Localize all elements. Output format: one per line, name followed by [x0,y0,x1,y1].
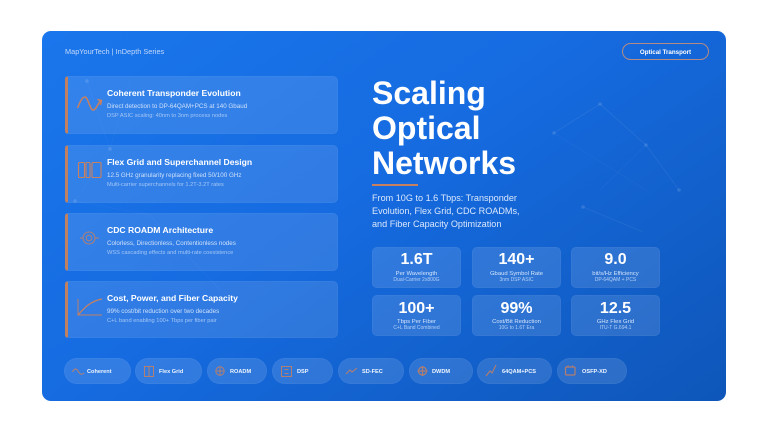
pill: 64QAM+PCS: 64QAM+PCS [502,369,536,375]
icon: chip [281,366,292,377]
stat: 1.6T: Dual-Carrier 2x800G [393,277,440,283]
badge: Optical Transport: Optical Transport [640,49,691,56]
icon: cost curve [77,298,102,316]
icon: node [215,366,225,376]
stat: 100+ [372,295,461,336]
heading: Cost, Power, and Fiber Capacity [107,293,238,303]
card: Coherent Transponder Evolution [65,76,338,134]
title accent rule [372,184,418,186]
pill: ROADM: ROADM [230,369,251,375]
stat: 1.6T: Per Wavelength [396,271,437,277]
stat: 100+: C+L Band Combined [393,325,440,331]
subtitle: From 10G to 1.6 Tbps: Transponder [372,193,517,203]
stat: 12.5: 12.5 [600,300,631,317]
icon: wave [72,368,84,375]
icon: trend [346,368,358,374]
stat: 1.6T: 1.6T [400,251,432,268]
icon: ROADM node [80,232,99,244]
icon: slots [144,366,154,377]
badge: Optical Transport [622,43,709,60]
stat: 9.0: DP-64QAM + PCS [595,277,636,283]
stat: 99% [472,295,561,336]
stat: 9.0: bit/s/Hz Efficiency [592,271,639,277]
pill: Coherent: Coherent [87,369,112,375]
detail: DSP ASIC scaling: 40nm to 3nm process nodes [107,113,227,119]
network constellation background [73,79,681,290]
description: 99% cost/bit reduction over two decades [107,308,219,315]
panel: main background [42,31,726,401]
detail: Multi-carrier superchannels for 1.2T-3.2T rates [107,182,224,188]
heading: Coherent Transponder Evolution [107,88,241,98]
heading: Flex Grid and Superchannel Design [107,157,252,167]
pill: 64QAM+PCS [477,358,552,384]
stat: 12.5: GHz Flex Grid [597,319,634,325]
stat: 9.0 [571,247,660,288]
stat: 12.5 [571,295,660,336]
detail: C+L band enabling 100+ Tbps per fiber pair [107,318,217,324]
subtitle [372,193,520,229]
icon: rising trend [486,364,496,376]
icon: diamond node [418,366,428,376]
pill: DWDM: DWDM [432,369,450,375]
title: Optical [372,110,480,146]
icon: channel slots [78,162,102,178]
description: Direct detection to DP-64QAM+PCS at 140 Gbaud [107,103,247,110]
subtitle: Evolution, Flex Grid, CDC ROADMs, [372,206,520,216]
title [372,75,516,181]
stat: 99%: 99% [500,300,533,317]
title: Scaling [372,75,486,111]
card: Flex Grid and Superchannel Design [65,145,338,203]
stat: 100+: 100+ [398,300,435,317]
title: Networks [372,145,516,181]
stat: 9.0: 9.0 [604,251,627,268]
detail: WSS cascading effects and multi-rate coexistence [107,250,233,256]
icon: module [564,366,576,376]
pill: SD-FEC: SD-FEC [362,369,383,375]
stat: 140+ [472,247,561,288]
pill: DSP: DSP [297,369,309,375]
header: series label: MapYourTech | InDepth Series [65,47,164,56]
card: Cost, Power, and Fiber Capacity [65,281,338,338]
pill: DSP [272,358,333,384]
pill: OSFP-XD: OSFP-XD [582,369,607,375]
stat: 99%: Cost/Bit Reduction [492,319,541,325]
pill: Coherent [64,358,131,384]
icon: wave [77,96,102,111]
stat: 140+: 140+ [498,251,535,268]
heading: CDC ROADM Architecture [107,225,213,235]
pill: Flex Grid: Flex Grid [159,369,183,375]
pill: OSFP-XD [557,358,627,384]
stat: 140+: Gbaud Symbol Rate [490,271,543,277]
pill: Flex Grid [135,358,202,384]
description: 12.5 GHz granularity replacing fixed 50/100 GHz [107,172,241,179]
description: Colorless, Directionless, Contentionless nodes [107,240,236,247]
pill: DWDM [409,358,473,384]
stat: 12.5: ITU-T G.694.1 [600,325,631,331]
pill: ROADM [207,358,267,384]
subtitle: and Fiber Capacity Optimization [372,219,501,229]
stat: 1.6T [372,247,461,288]
pill: SD-FEC [338,358,404,384]
stat: 99%: 10G to 1.6T Era [499,325,534,331]
card: CDC ROADM Architecture [65,213,338,271]
stat: 140+: 3nm DSP ASIC [499,277,534,283]
stat: 100+: Tbps Per Fiber [397,319,436,325]
